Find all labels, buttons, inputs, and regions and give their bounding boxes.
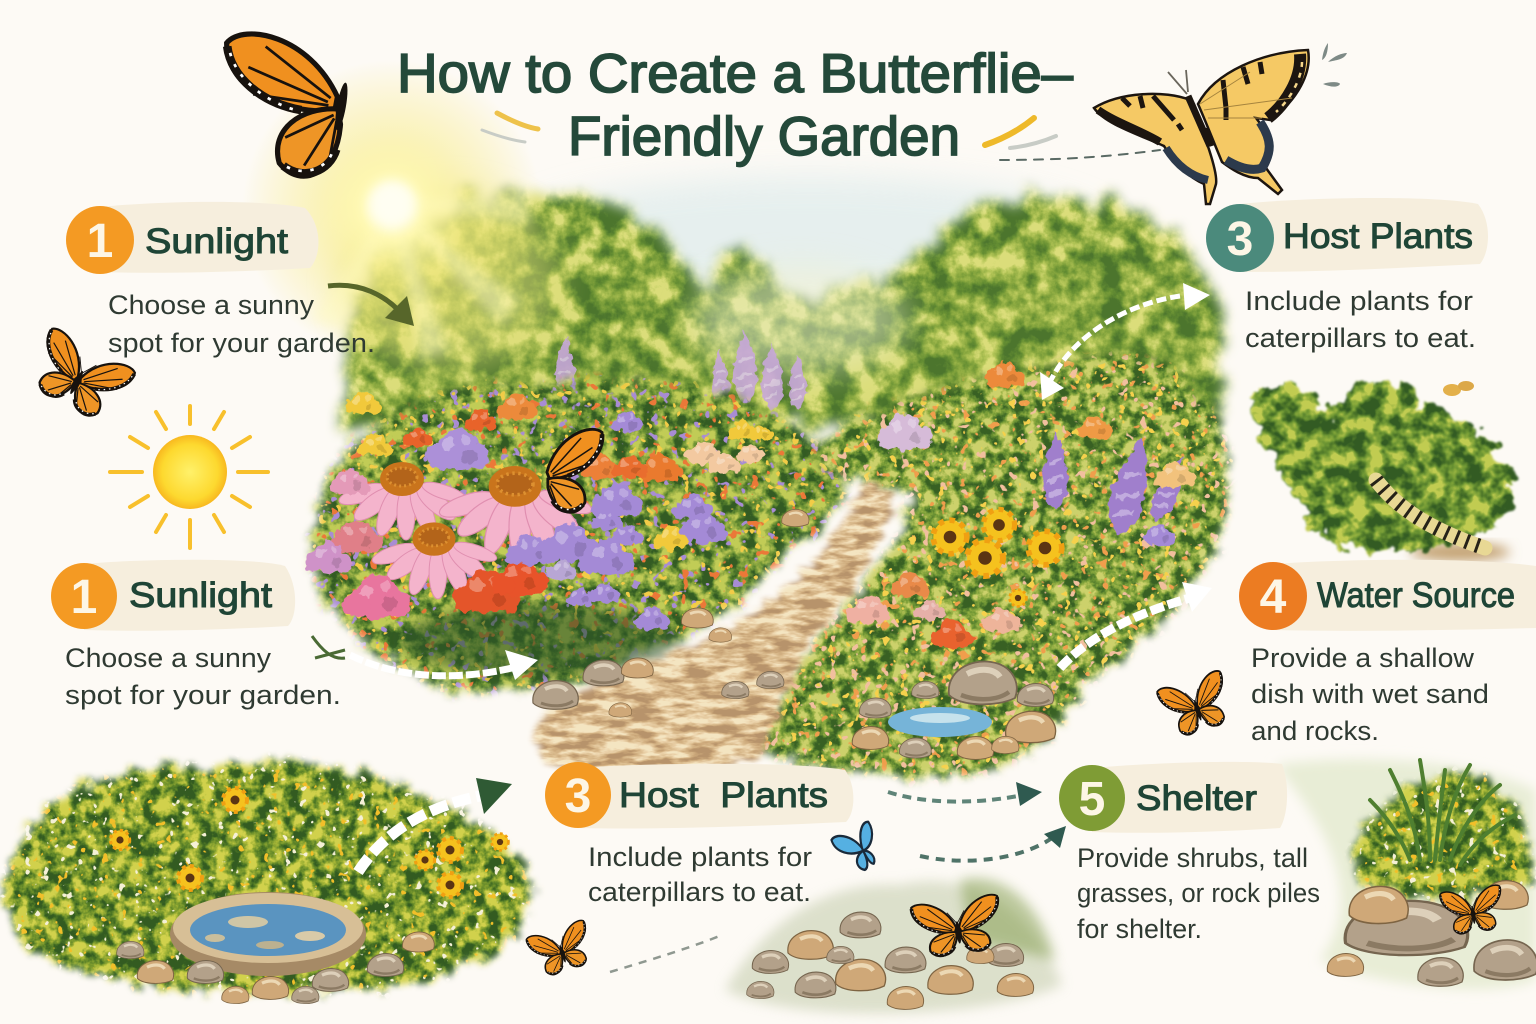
label pill [1273,560,1536,631]
sky behind the trees [510,175,1110,295]
description: caterpillars to eat. [1245,323,1476,353]
description: Include plants for [1245,286,1473,316]
description [108,290,375,358]
description: spot for your garden. [108,328,375,358]
right wing [1198,50,1309,194]
description: Choose a sunny [108,290,315,320]
illustration: small monarch, right [1156,670,1236,740]
illustration: swallowtail butterfly [1094,43,1347,204]
stones [117,932,434,1004]
description [1245,286,1476,353]
number badge [1059,765,1125,831]
description: Include plants for [588,842,812,872]
black bands [1268,54,1300,118]
description: dish with wet sand [1251,679,1489,709]
description [65,643,341,710]
distant purple spires [555,331,807,410]
step: Shelter [1059,762,1320,944]
description [588,842,812,907]
label pill [578,764,853,829]
label pill [84,560,295,631]
arrow: sunlight to sun rays [328,285,414,326]
pale wash over the middle distance [690,265,910,375]
number badge: 3 [1227,213,1253,266]
arrow: double-headed to host plants [1040,283,1210,400]
flowers [110,788,508,897]
description: Provide a shallow [1251,643,1475,673]
number badge [545,762,611,828]
step: Host Plants (top right) [1206,198,1488,353]
description: caterpillars to eat. [588,877,811,907]
title [397,42,1073,167]
foreground shade in left bed [400,604,680,676]
rock border and stones [533,509,809,717]
number badge: 1 [87,215,113,268]
illustration: small monarch, bottom left [526,919,597,980]
grass blades [1370,760,1515,865]
left flower bed [312,379,845,693]
number badge [66,206,134,274]
sunlit foliage near the sun [340,190,560,370]
step: Host Plants (bottom) [545,762,853,907]
step: Sunlight (top) [66,202,375,358]
illustration: monarch on coneflower [547,429,602,512]
description [1077,843,1320,944]
arrow: pond to water source [1060,582,1212,668]
illustration: host plant and caterpillar [1252,379,1515,561]
heading: Water Source [1317,576,1515,615]
number badge [1239,562,1307,630]
arrow: bird bath to host plants [358,778,512,872]
illustration: central garden scene [242,60,1228,777]
arrow: dashed from small butterfly [610,935,722,972]
right flower bed [750,354,1228,777]
description [1251,643,1489,746]
number badge: 1 [71,571,97,624]
heading: Host Plants [619,776,828,815]
description: for shelter. [1077,914,1202,944]
description: and rocks. [1251,716,1379,746]
bird bath [170,892,366,976]
label pill [1092,762,1287,833]
label pill [100,202,318,273]
description: Choose a sunny [65,643,272,673]
flower clusters, right bed [846,362,1195,648]
title: How to Create a Butterflie– [397,42,1073,104]
sun glow [242,60,542,360]
illustration: shelter with grass and rocks [1275,759,1536,989]
description: Provide shrubs, tall [1077,843,1308,873]
illustration: bottom-left garden with bird bath [4,760,530,1004]
number badge [1206,204,1274,272]
pink coneflowers [337,462,594,599]
icon: sun [110,406,268,548]
arrow: host plants to shelter [888,782,1042,806]
heading: Host Plants [1283,217,1473,256]
illustration: bottom-centre rock pile [725,878,1062,1013]
number badge: 3 [565,770,591,823]
title accents [482,113,1160,160]
illustration: blue butterfly [831,821,886,877]
description: spot for your garden. [65,680,341,710]
title: Friendly Garden [568,105,960,167]
heading: Sunlight [129,576,272,615]
illustration: top-left monarch butterfly [225,18,365,186]
arrow: lower dashed to shelter [920,826,1066,861]
left wing [1094,94,1216,204]
description: grasses, or rock piles [1077,878,1320,908]
number badge: 4 [1260,571,1287,624]
blue hindwing bands [1226,122,1269,169]
step: Sunlight (lower) [51,560,341,710]
number badge [51,563,117,629]
dirt path [535,485,892,777]
heading: Shelter [1136,779,1257,818]
number badge: 5 [1079,773,1105,826]
tree line [340,192,1223,430]
arrow: lower sunlight into garden [312,636,538,680]
illustration: small monarch, left [23,327,136,426]
heading: Sunlight [145,222,288,261]
lupine spikes [1042,432,1194,539]
step: Water Source [1239,560,1536,746]
water dish with rocks [852,662,1056,759]
label pill [1240,198,1488,272]
flower clusters, left bed [304,391,774,630]
